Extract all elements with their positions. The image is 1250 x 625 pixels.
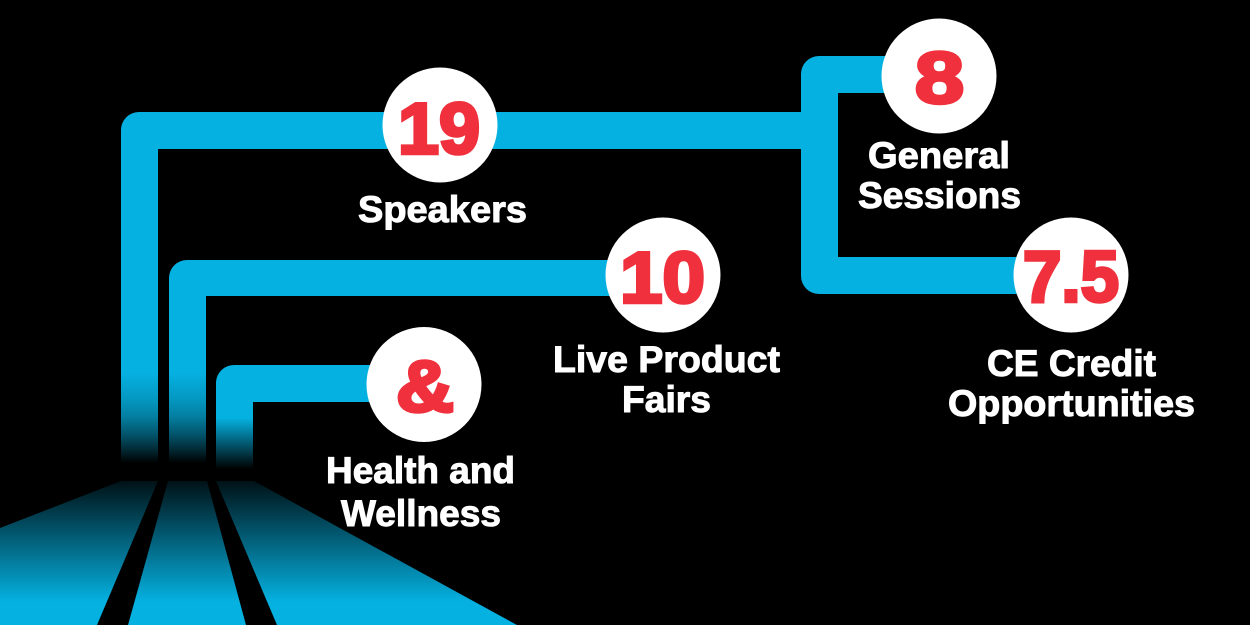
stat: 19 speakers: Speakers <box>358 189 527 230</box>
floor: three converging lanes <box>0 481 517 625</box>
stat: 8 general sessions: 8 <box>915 39 964 119</box>
stat: health and wellness: & <box>396 348 454 428</box>
stat: 19 speakers <box>358 68 527 230</box>
stat: 19 speakers: 19 <box>398 90 480 170</box>
stat: 10 live product fairs: 10 <box>620 238 705 318</box>
stat: 8 general sessions <box>858 18 1021 216</box>
stat: 7.5 CE credit opportunities <box>948 218 1195 424</box>
stat: 7.5 CE credit opportunities: Opportunities <box>948 383 1195 424</box>
stat: 8 general sessions: Sessions <box>858 175 1021 216</box>
stat: health and wellness: Health and <box>326 450 515 491</box>
stat: 7.5 CE credit opportunities: CE Credit <box>987 343 1156 384</box>
stat: 10 live product fairs: Fairs <box>622 379 711 420</box>
pipe: live product fairs <box>169 260 630 463</box>
stat: 8 general sessions: General <box>868 135 1010 176</box>
stat: 10 live product fairs <box>553 218 780 420</box>
stat: health and wellness <box>326 327 515 534</box>
stat: 10 live product fairs: Live Product <box>553 339 780 380</box>
pipe: speakers to general sessions and CE credits <box>121 56 1030 463</box>
stat: 7.5 CE credit opportunities: 7.5 <box>1023 238 1119 318</box>
stat: health and wellness: Wellness <box>341 493 501 534</box>
pipe: health and wellness <box>216 365 390 469</box>
